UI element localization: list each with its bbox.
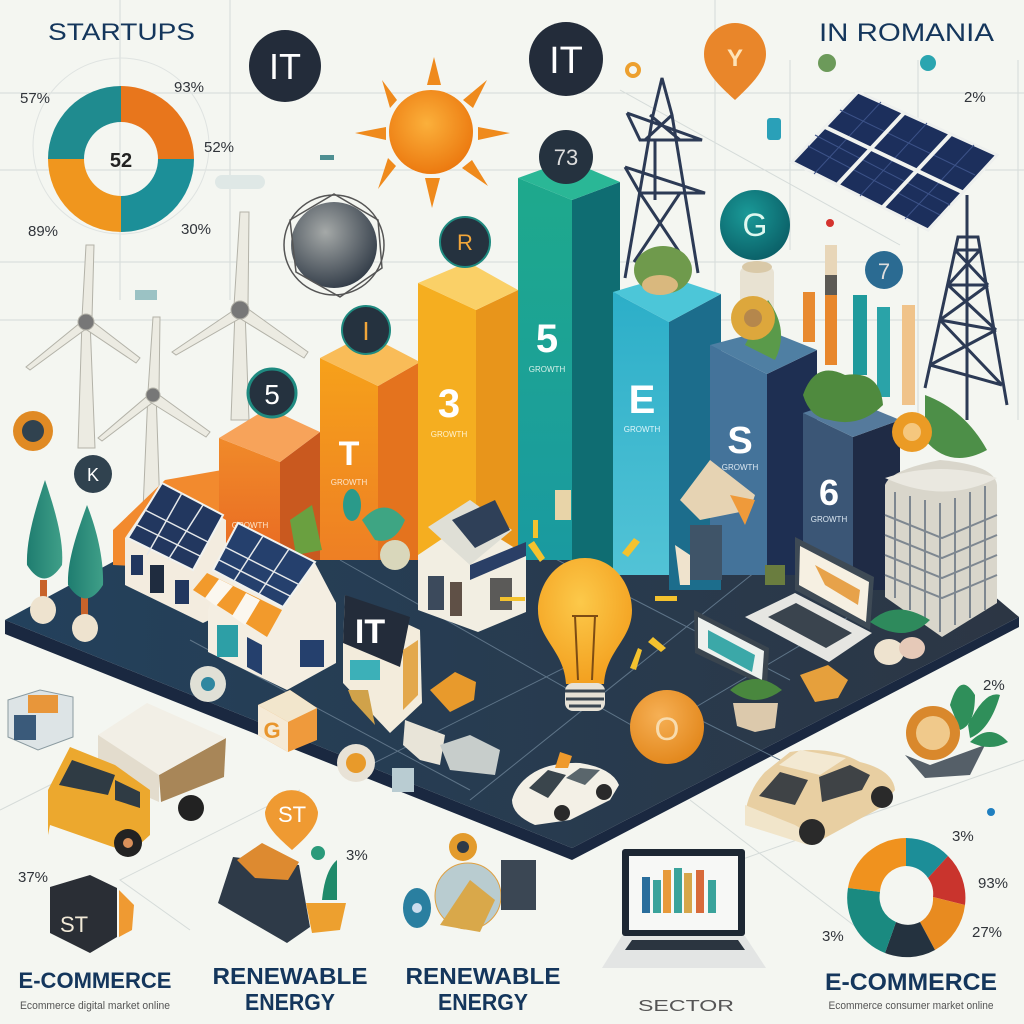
bar 5 cyan: GROWTH — [624, 425, 660, 434]
percent labels bottom: 3% — [952, 828, 974, 845]
donut labels: 57% — [20, 90, 50, 107]
truck — [48, 703, 226, 857]
shop house — [193, 523, 336, 690]
caption: e-commerce right — [825, 969, 997, 1012]
yellow dashes around bulb — [500, 520, 677, 670]
caption: renewable energy 2: ENERGY — [438, 989, 528, 1015]
bar 2 amber: GROWTH — [331, 478, 367, 487]
caption: e-commerce right: E-COMMERCE — [825, 969, 997, 996]
badge: K: K — [87, 465, 99, 485]
icon: orange pin — [704, 23, 766, 100]
house with solar roof — [125, 483, 226, 623]
tablet on platform — [694, 610, 769, 687]
badge: G teal — [720, 190, 790, 260]
coin plant right — [905, 685, 1008, 778]
bar 4 green: 5 — [536, 317, 558, 361]
blue dot — [987, 808, 995, 816]
percent labels bottom: 3% — [822, 928, 844, 945]
platform front edge — [5, 617, 1019, 860]
car: beige — [745, 750, 895, 845]
donut labels: 30% — [181, 221, 211, 238]
bar 2 amber: T — [339, 435, 360, 473]
bar 3 yellow: 3 — [438, 382, 460, 426]
donut labels: 93% — [174, 79, 204, 96]
bar 7 dark: GROWTH — [811, 515, 847, 524]
office tower — [885, 460, 997, 637]
percent labels bottom: 3% — [346, 847, 368, 864]
percent labels bottom: 93% — [978, 875, 1008, 892]
icon: renewable device — [403, 833, 536, 932]
donut chart: top left: 52 — [110, 150, 132, 172]
bar 4 green — [518, 160, 620, 575]
heading: in Romania: IN ROMANIA — [819, 19, 994, 47]
badge: K — [74, 455, 112, 493]
caption: e-commerce left — [18, 968, 172, 1012]
bar 6 slate blue: S — [727, 420, 753, 462]
icon: pylon center — [625, 78, 705, 278]
badge: 7: 7 — [878, 259, 890, 284]
donut labels: 52% — [204, 139, 234, 156]
foliage and coins on bars — [634, 246, 987, 458]
bar 5 cyan — [613, 276, 721, 590]
caption: sector: SECTOR — [638, 998, 734, 1015]
badge: I — [342, 306, 390, 354]
badge: 73: 73 — [554, 145, 578, 170]
trees — [27, 480, 103, 642]
bar 7 dark: 6 — [819, 472, 839, 513]
small floating icons — [135, 54, 936, 300]
bar 6 slate blue: GROWTH — [722, 463, 758, 472]
bottle behind slate bar — [740, 261, 774, 327]
caption: renewable energy 1 — [212, 963, 368, 1015]
icon: orange pin: Y — [727, 45, 743, 72]
badge: R: R — [457, 230, 473, 255]
icon: store — [218, 843, 346, 943]
icon: pylon right — [925, 195, 1007, 420]
bar 1 orange: GROWTH — [232, 521, 268, 530]
icon: orange ball: O — [655, 711, 679, 747]
badge: I: I — [362, 316, 370, 346]
icon: ST pin: ST — [278, 802, 306, 827]
platform grid — [190, 520, 860, 800]
donut chart: bottom right — [847, 838, 965, 957]
caption: e-commerce right: Ecommerce consumer market online — [828, 1000, 994, 1012]
percent labels bottom: 27% — [972, 924, 1002, 941]
bar 3 yellow — [418, 262, 518, 560]
icon: wind turbines — [26, 212, 308, 510]
plants on platform — [730, 609, 930, 732]
donut chart: top left — [33, 58, 209, 234]
icon: laptop bottom — [602, 849, 766, 968]
caption: renewable energy 1: RENEWABLE — [212, 963, 368, 989]
bar 7 dark — [803, 398, 900, 590]
badge: IT center: IT — [549, 40, 583, 82]
percent labels bottom — [18, 677, 1008, 945]
icon: ST pin — [265, 790, 318, 850]
heading: startups: STARTUPS — [48, 19, 195, 46]
donut labels: 2% — [964, 89, 986, 106]
percent labels bottom: 37% — [18, 869, 48, 886]
bar 1 orange — [219, 408, 320, 560]
badge: 5: 5 — [264, 379, 280, 410]
badge: IT left — [249, 30, 321, 102]
badge: 73 — [539, 130, 593, 184]
icon: solar panel top right — [792, 92, 997, 230]
small chart bars right — [803, 245, 915, 405]
laptop on platform — [745, 537, 874, 662]
badge: IT left: IT — [269, 46, 301, 87]
platform top — [5, 500, 1019, 848]
donut labels — [20, 79, 986, 240]
badge: IT center — [529, 22, 603, 96]
badge: R — [440, 217, 490, 267]
percent labels bottom: 2% — [983, 677, 1005, 694]
caption: renewable energy 1: ENERGY — [245, 989, 335, 1015]
caption: e-commerce left: Ecommerce digital market online — [20, 1000, 170, 1012]
small items on platform — [190, 665, 848, 792]
bar 3 yellow: GROWTH — [431, 430, 467, 439]
bar chart: isometric bars — [219, 160, 900, 590]
car: white — [512, 752, 619, 825]
badge: 5 — [248, 369, 296, 417]
icon: lightbulb — [538, 558, 632, 711]
caption: renewable energy 2: RENEWABLE — [406, 963, 560, 989]
clutter at bar bases — [290, 460, 785, 585]
icon: orange ball — [630, 690, 704, 764]
icon: small box left — [8, 690, 73, 750]
bar 6 slate blue — [710, 330, 817, 575]
icon: ST cube: ST — [60, 912, 88, 937]
badges on bars — [13, 130, 903, 493]
icon: sun — [355, 57, 510, 208]
badge: G teal: G — [743, 207, 767, 243]
small items on platform: G — [263, 718, 281, 743]
bar 2 amber — [320, 334, 420, 560]
bar 4 green: GROWTH — [529, 365, 565, 374]
building center — [418, 500, 526, 632]
icon: ST cube — [50, 875, 134, 953]
donut labels: 89% — [28, 223, 58, 240]
bar 5 cyan: E — [629, 378, 655, 422]
badge: small left — [13, 411, 53, 451]
IT building — [343, 595, 422, 733]
caption: e-commerce left: E-COMMERCE — [18, 968, 172, 993]
orange block behind house — [113, 470, 222, 570]
IT building: IT — [355, 613, 385, 651]
icon: globe network — [284, 194, 384, 297]
badge: 7 — [865, 251, 903, 289]
caption: renewable energy 2 — [406, 963, 560, 1015]
